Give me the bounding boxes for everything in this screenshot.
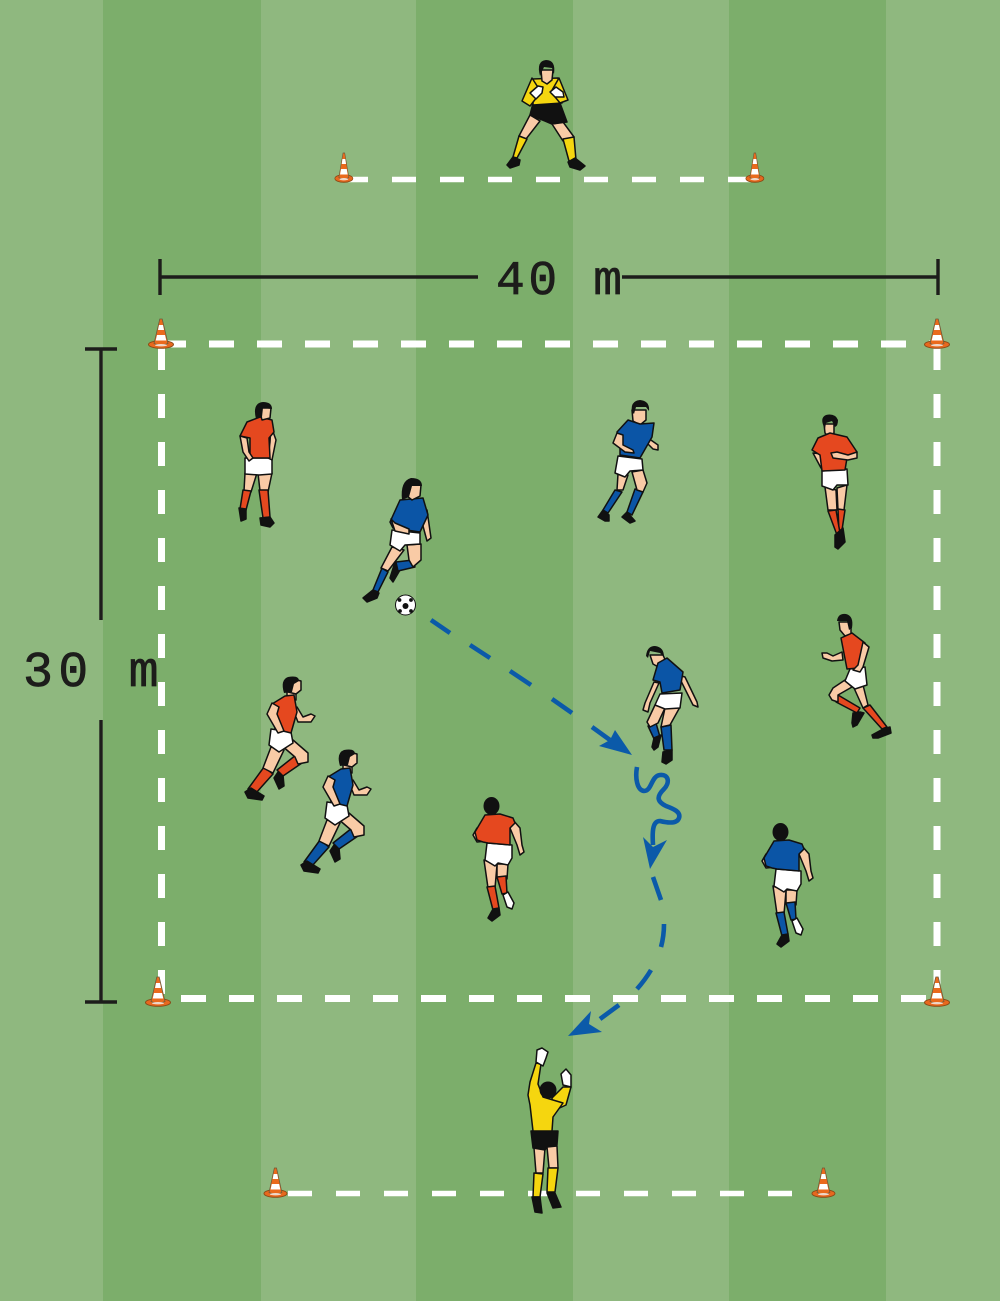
playing area dashed boundary bbox=[161, 344, 937, 998]
red player, back view bbox=[473, 797, 524, 921]
cones bbox=[146, 153, 950, 1197]
blue runner, left bbox=[301, 750, 371, 873]
bottom goal line bbox=[288, 1191, 815, 1196]
blue player with ball, dribbling bbox=[363, 478, 431, 602]
top goal line bbox=[344, 177, 755, 182]
blue player heading, centre right bbox=[643, 646, 698, 764]
blue player, back view bbox=[762, 823, 813, 947]
dimension: 30 m bbox=[23, 349, 164, 1002]
red player, top right bbox=[812, 415, 857, 549]
shot arrow to goalkeeper bbox=[568, 877, 664, 1036]
red player standing, top left bbox=[239, 402, 276, 527]
red runner, left bbox=[245, 676, 315, 800]
dimension: 30 m: 30 m bbox=[23, 645, 164, 702]
blue player, top centre bbox=[598, 400, 658, 523]
ball bbox=[396, 595, 416, 615]
goalkeeper top bbox=[507, 60, 585, 170]
pass arrow to the dribble bbox=[431, 620, 632, 755]
red player running, right bbox=[822, 614, 891, 738]
dribble squiggle arrow bbox=[636, 767, 679, 869]
dimension: 40 m: 40 m bbox=[496, 255, 626, 309]
goalkeeper bottom bbox=[528, 1048, 571, 1213]
dimension: 40 m bbox=[160, 255, 938, 309]
